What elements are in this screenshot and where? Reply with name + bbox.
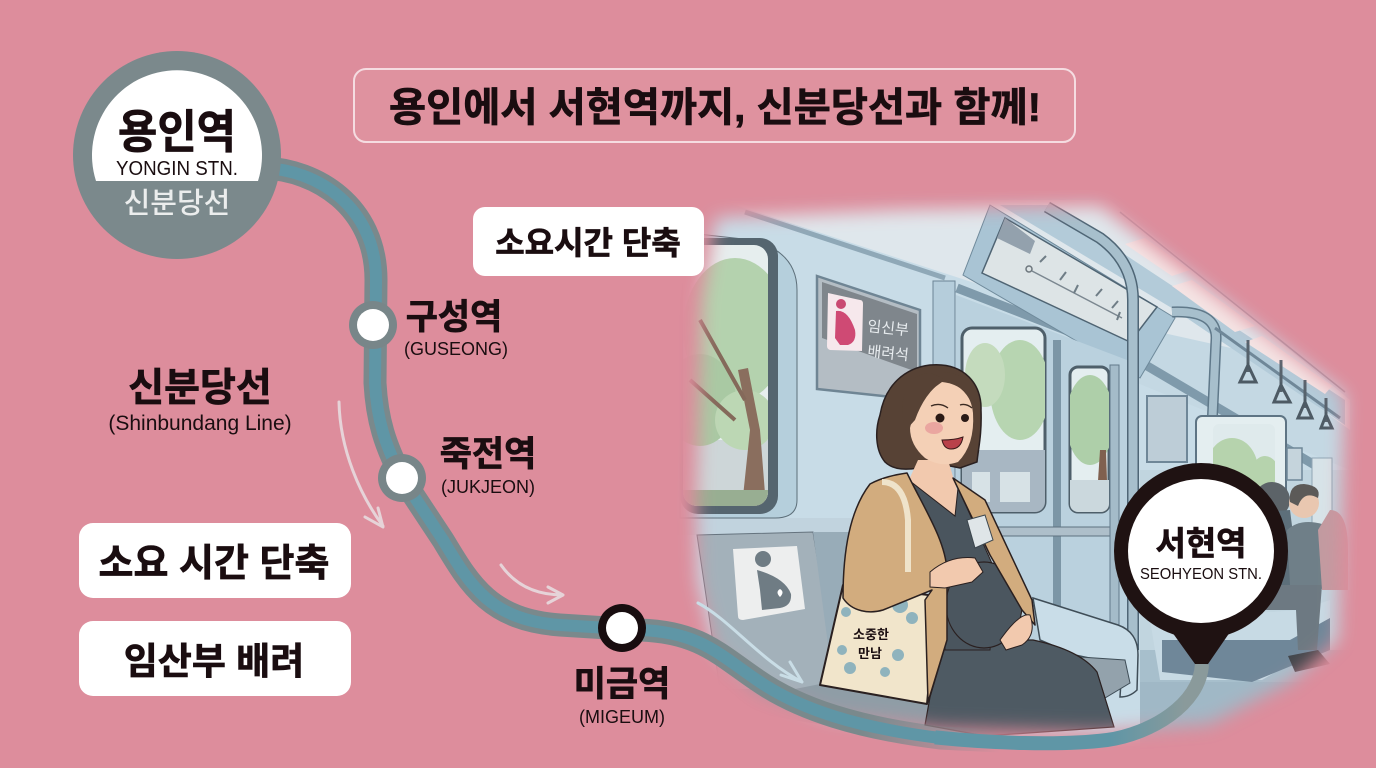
title banner: 용인에서 서현역까지, 신분당선과 함께!: [389, 86, 1041, 130]
callout: travel time saved (top): [473, 207, 704, 276]
train wall and ceiling: [686, 196, 1355, 740]
hair back: [877, 365, 981, 469]
callout: travel time saved: [79, 523, 351, 598]
station: Guseong: 구성역: [406, 298, 502, 337]
callout: travel time saved (top): 소요시간 단축: [495, 225, 681, 261]
line name label: 신분당선: [128, 367, 272, 410]
route line: Shinbundang Line: [265, 168, 1202, 743]
neck: [908, 460, 957, 516]
hands: [930, 558, 983, 588]
callout: consideration for pregnant women: 임산부 배려: [124, 641, 304, 682]
station: Jukjeon: 죽전역: [440, 435, 536, 474]
sign: pregnancy priority seat: [817, 276, 920, 400]
belly: [946, 562, 1022, 648]
callout: travel time saved: 소요 시간 단축: [99, 543, 329, 585]
sign: pregnancy priority seat: 임신부: [867, 318, 910, 339]
line name label: [108, 367, 292, 435]
direction arrows: [339, 402, 802, 682]
tote bag: [820, 585, 937, 704]
line name label: (Shinbundang Line): [108, 412, 292, 435]
station: Guseong: (GUSEONG): [404, 339, 508, 359]
station: Guseong: [349, 298, 508, 359]
station: Jukjeon: (JUKJEON): [441, 477, 535, 497]
overhead route map: [963, 205, 1175, 378]
title banner: [354, 69, 1075, 142]
arrow: toward Jukjeon: [339, 402, 383, 527]
arrow: toward Seohyeon: [698, 603, 802, 682]
right wall panels and window: [1147, 396, 1332, 528]
bag strap: [882, 482, 908, 572]
destination pin: Seohyeon Station: SEOHYEON STN.: [1140, 566, 1262, 583]
pregnant woman: [820, 365, 1114, 736]
left window: [683, 234, 798, 518]
vertical poles and handles: [1047, 207, 1340, 650]
dress top: [910, 481, 995, 650]
tote bag: 소중한: [853, 627, 889, 642]
station: Migeum: (MIGEUM): [579, 707, 665, 727]
station: Migeum: [574, 604, 670, 727]
skirt: [925, 640, 1114, 736]
tote bag: 만남: [858, 646, 882, 661]
destination pin: Seohyeon Station: [1114, 463, 1288, 664]
cardigan: [843, 473, 947, 702]
seated passengers: [1254, 482, 1348, 672]
terminal badge: Yongin Station: 용인역: [118, 106, 236, 158]
destination pin: Seohyeon Station: 서현역: [1155, 525, 1247, 562]
terminal badge: Yongin Station: [73, 51, 281, 259]
terminal badge: Yongin Station: 신분당선: [124, 187, 230, 220]
terminal badge: Yongin Station: YONGIN STN.: [116, 158, 238, 180]
arrow: toward Migeum: [501, 565, 563, 603]
face: [910, 382, 973, 464]
seat cushions: [1033, 598, 1138, 698]
right bench and floor: [1155, 618, 1330, 682]
station: Jukjeon: [378, 435, 536, 502]
sign: pregnancy priority seat: 배려석: [867, 343, 910, 364]
door frames and windows: [933, 281, 1127, 660]
callout: consideration for pregnant women: [79, 621, 351, 696]
ID badge: [967, 515, 993, 548]
illustration: subway interior with pregnant passenger: [683, 196, 1355, 740]
priority seat with icon: [696, 532, 961, 732]
station: Migeum: 미금역: [574, 665, 670, 704]
